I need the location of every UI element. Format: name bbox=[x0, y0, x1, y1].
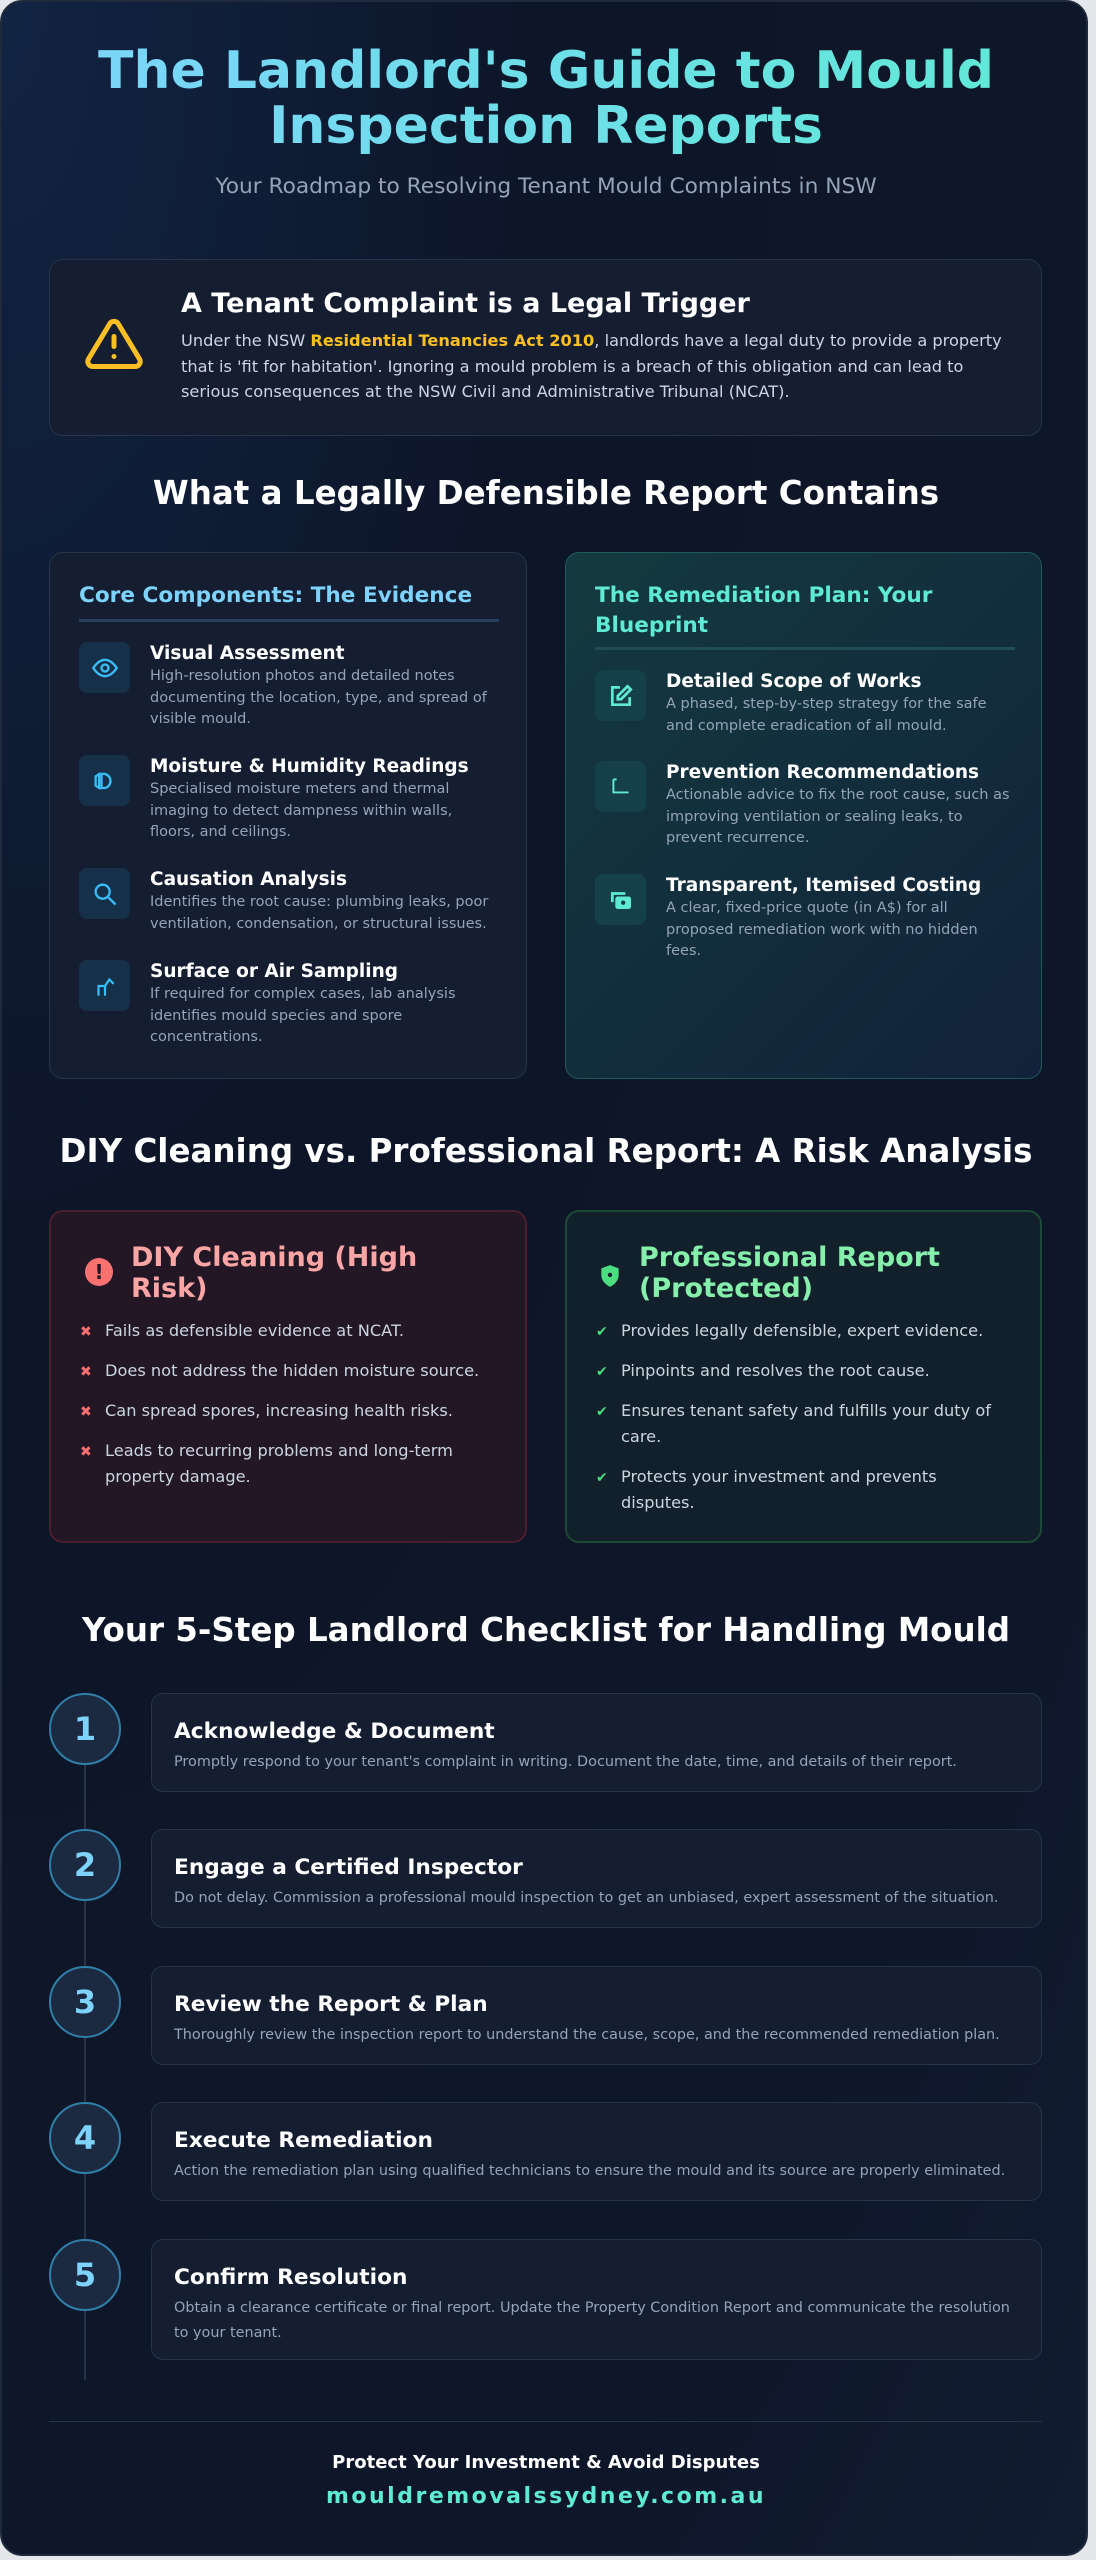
panel: professional report bbox=[565, 1210, 1042, 1543]
item: visual assessment bbox=[79, 642, 488, 727]
item: sampling bbox=[79, 960, 456, 1045]
DIY list bbox=[80, 1321, 479, 1486]
timeline: checklist steps: Thoroughly review the inspection report to understand the cause, scope, and the recommended remediation plan. bbox=[174, 2027, 1000, 2043]
timeline: checklist steps: Confirm Resolution bbox=[174, 2265, 407, 2290]
timeline: checklist steps: Action the remediation plan using qualified technicians to ensure the mould and its source are properly eliminated. bbox=[174, 2163, 1005, 2179]
icon: moisture bbox=[79, 755, 130, 806]
item: visual assessment: High-resolution photos and detailed notes documenting the location, type, and spread of visible mould. bbox=[150, 668, 487, 727]
icon: shield bbox=[601, 1265, 619, 1287]
icon: warning triangle bbox=[85, 318, 143, 369]
item: prevention: Actionable advice to fix the root cause, such as improving ventilation or sealing leaks, to prevent recurrence. bbox=[666, 787, 1010, 846]
professional list: ✔ bbox=[596, 1324, 608, 1340]
professional list: ✔ bbox=[596, 1364, 608, 1380]
timeline: checklist steps: Do not delay. Commission a professional mould inspection to get an unbiased, expert assessment of the situation. bbox=[174, 1890, 998, 1906]
panel: remediation plan bbox=[565, 552, 1042, 1079]
timeline: checklist steps: 3 bbox=[74, 1983, 96, 2021]
alert text: Under the NSW Residential Tenancies Act 2010, landlords have a legal duty to provide a property that is 'fit for habitation'. Ignoring a mould problem is a breach of this obligation and can lead to serious consequences at the NSW Civil and Administrative Tribunal (NCAT). bbox=[181, 331, 1002, 401]
footer tagline: Protect Your Investment & Avoid Disputes bbox=[332, 2452, 760, 2473]
professional list: ✔ bbox=[596, 1404, 608, 1420]
professional list: Ensures tenant safety and fulfills your duty of care. bbox=[621, 1401, 991, 1446]
professional list: Protects your investment and prevents disputes. bbox=[621, 1467, 937, 1512]
item: moisture readings bbox=[79, 755, 469, 840]
panel: core components bbox=[49, 552, 527, 1079]
item: costing: Transparent, Itemised Costing bbox=[666, 875, 981, 896]
item: sampling: If required for complex cases, lab analysis identifies mould species and spore concentrations. bbox=[150, 986, 456, 1045]
DIY list: Leads to recurring problems and long-term property damage. bbox=[105, 1441, 453, 1486]
icon: alert circle: ! bbox=[94, 1260, 104, 1284]
item: costing: A clear, fixed-price quote (in A$) for all proposed remediation work with no hidden fees. bbox=[666, 900, 978, 959]
DIY list: Does not address the hidden moisture source. bbox=[105, 1361, 479, 1380]
item: moisture readings: Moisture & Humidity Readings bbox=[150, 756, 469, 777]
icon: alert circle bbox=[85, 1258, 113, 1286]
panel: legal trigger alert bbox=[49, 259, 1042, 436]
alert heading: A Tenant Complaint is a Legal Trigger bbox=[181, 288, 750, 319]
timeline: checklist steps bbox=[49, 1693, 1042, 2380]
professional list bbox=[596, 1321, 992, 1512]
footer URL: mouldremovalssydney.com.au bbox=[326, 2484, 766, 2509]
professional list: Pinpoints and resolves the root cause. bbox=[621, 1361, 930, 1380]
professional list: Provides legally defensible, expert evidence. bbox=[621, 1321, 983, 1340]
item: scope of works: A phased, step-by-step strategy for the safe and complete eradication of all mould. bbox=[666, 696, 987, 734]
DIY list: Fails as defensible evidence at NCAT. bbox=[105, 1321, 404, 1340]
icon: prevention bbox=[595, 761, 646, 812]
item: scope of works bbox=[595, 670, 987, 734]
panel heading: The Remediation Plan: Your Blueprint bbox=[595, 583, 932, 638]
DIY list: ✖ bbox=[80, 1324, 92, 1340]
timeline: checklist steps: Obtain a clearance certificate or final report. Update the Property Condition Report and communicate the resolution to your tenant. bbox=[174, 2300, 1010, 2341]
icon: magnifier bbox=[79, 868, 130, 919]
step 4 bbox=[49, 2102, 1042, 2201]
timeline: checklist steps: Execute Remediation bbox=[174, 2128, 433, 2153]
step 1 bbox=[49, 1693, 1042, 1792]
timeline: checklist steps: Promptly respond to your tenant's complaint in writing. Document the date, time, and details of their report. bbox=[174, 1754, 957, 1770]
step 5 bbox=[49, 2239, 1042, 2360]
DIY heading: DIY Cleaning (High Risk) bbox=[131, 1242, 417, 1304]
DIY list: ✖ bbox=[80, 1364, 92, 1380]
item: prevention bbox=[595, 761, 1010, 846]
item: moisture readings: Specialised moisture meters and thermal imaging to detect dampness within walls, floors, and ceilings. bbox=[150, 781, 452, 840]
item: causation bbox=[79, 868, 488, 932]
step 2 bbox=[49, 1829, 1042, 1928]
item: sampling: Surface or Air Sampling bbox=[150, 961, 398, 982]
DIY list: ✖ bbox=[80, 1404, 92, 1420]
title bbox=[2, 44, 1090, 154]
title: Inspection Reports bbox=[269, 96, 823, 156]
item: prevention: Prevention Recommendations bbox=[666, 762, 979, 783]
timeline: checklist steps: Review the Report & Plan bbox=[174, 1992, 488, 2017]
timeline: checklist steps: 5 bbox=[74, 2256, 96, 2294]
panel: DIY cleaning bbox=[49, 1210, 527, 1543]
heading: checklist: Your 5-Step Landlord Checklist for Handling Mould bbox=[82, 1611, 1010, 1649]
DIY list: Can spread spores, increasing health risks. bbox=[105, 1401, 453, 1420]
item: causation: Identifies the root cause: plumbing leaks, poor ventilation, condensation, or structural issues. bbox=[150, 894, 488, 932]
item: causation: Causation Analysis bbox=[150, 869, 347, 890]
panel heading: Core Components: The Evidence bbox=[79, 583, 472, 608]
timeline: checklist steps: Engage a Certified Inspector bbox=[174, 1855, 523, 1880]
DIY list: ✖ bbox=[80, 1444, 92, 1460]
timeline: checklist steps: 4 bbox=[74, 2119, 96, 2157]
timeline: checklist steps: 1 bbox=[74, 1710, 96, 1748]
professional heading: Professional Report (Protected) bbox=[639, 1242, 940, 1304]
item: costing bbox=[595, 874, 981, 959]
timeline: checklist steps: 2 bbox=[74, 1846, 96, 1884]
subtitle: Your Roadmap to Resolving Tenant Mould Complaints in NSW bbox=[215, 174, 877, 199]
heading: report contents: What a Legally Defensible Report Contains bbox=[153, 474, 939, 512]
icon: edit bbox=[595, 670, 646, 721]
icon: sampling bbox=[79, 960, 130, 1011]
item: visual assessment: Visual Assessment bbox=[150, 643, 345, 664]
item: scope of works: Detailed Scope of Works bbox=[666, 671, 921, 692]
icon: money bbox=[595, 874, 646, 925]
icon: eye bbox=[79, 642, 130, 693]
title: The Landlord's Guide to Mould bbox=[98, 41, 994, 101]
professional list: ✔ bbox=[596, 1470, 608, 1486]
timeline: checklist steps: Acknowledge & Document bbox=[174, 1719, 495, 1744]
heading: risk analysis: DIY Cleaning vs. Professional Report: A Risk Analysis bbox=[60, 1132, 1032, 1170]
step 3 bbox=[49, 1966, 1042, 2065]
